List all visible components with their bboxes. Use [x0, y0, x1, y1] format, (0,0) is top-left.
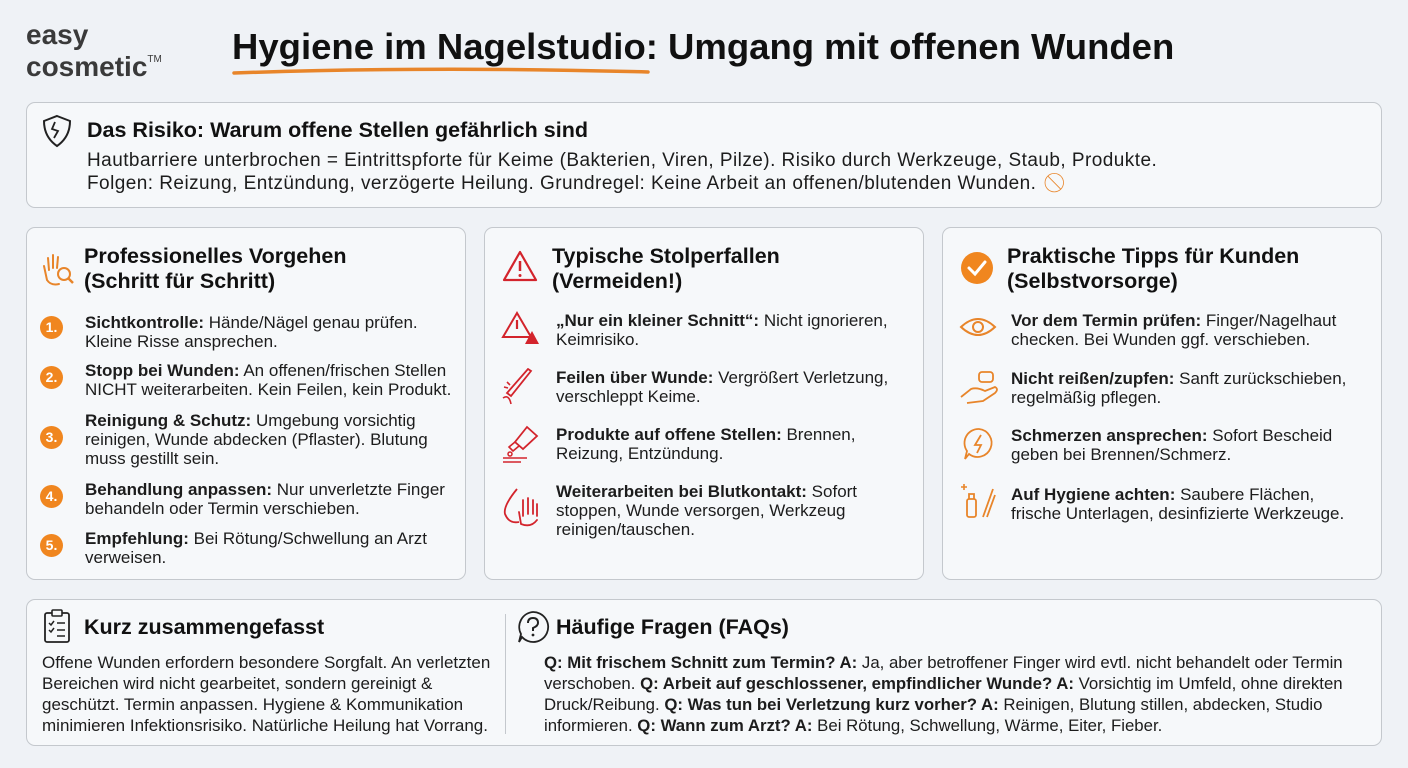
heading	[1007, 244, 1299, 293]
heading: (Vermeiden!)	[552, 269, 682, 293]
tip 4	[961, 484, 1344, 523]
icon: warning	[502, 250, 538, 282]
item 2: Feilen über Wunde: Vergrößert Verletzung,	[556, 368, 888, 387]
item 3: Reizung, Entzündung.	[556, 444, 723, 463]
body text: Folgen: Reizung, Entzündung, verzögerte Heilung. Grundregel: Keine Arbeit an offenen/blutenden Wunden. 🚫︎	[87, 173, 1067, 194]
step 3: Reinigung & Schutz: Umgebung vorsichtig	[85, 411, 416, 430]
step 4	[40, 480, 445, 518]
panel: stolperfallen	[484, 227, 924, 580]
heading: Das Risiko: Warum offene Stellen gefährlich sind	[87, 118, 588, 142]
step 3: 3.	[46, 429, 57, 445]
tip 2	[960, 369, 1346, 407]
step 4: 4.	[46, 488, 57, 504]
item 2: verschleppt Keime.	[556, 387, 701, 406]
body text: Hautbarriere unterbrochen = Eintrittspforte für Keime (Bakterien, Viren, Pilze). Risiko durch Werkzeuge, Staub, Produkte.	[87, 150, 1157, 171]
logo	[26, 19, 162, 82]
heading: faq: Häufige Fragen (FAQs)	[556, 615, 789, 639]
item 1: „Nur ein kleiner Schnitt“: Nicht ignorieren,	[556, 311, 888, 330]
summary text: geschützt. Termin anpassen. Hygiene & Kommunikation	[42, 695, 463, 714]
summary text	[42, 653, 490, 735]
step 1	[40, 313, 418, 351]
logo: cosmeticTM	[26, 51, 162, 82]
step 2: 2.	[46, 369, 57, 385]
summary text: minimieren Infektionsrisiko. Natürliche Heilung hat Vorrang.	[42, 716, 488, 735]
step 1: Kleine Risse ansprechen.	[85, 332, 278, 351]
step 3: reinigen, Wunde abdecken (Pflaster). Blutung	[85, 430, 428, 449]
item 4: reinigen/tauschen.	[556, 520, 695, 539]
tip 3: Schmerzen ansprechen: Sofort Bescheid	[1011, 426, 1332, 445]
step 4: Behandlung anpassen: Nur unverletzte Finger	[85, 480, 445, 499]
item 3: Produkte auf offene Stellen: Brennen,	[556, 425, 855, 444]
icon: question	[518, 611, 550, 643]
item 4: stoppen, Wunde versorgen, Werkzeug	[556, 501, 845, 520]
heading: Praktische Tipps für Kunden	[1007, 244, 1299, 268]
faq text: Druck/Reibung. Q: Was tun bei Verletzung kurz vorher? A: Reinigen, Blutung stillen, abdecken, Studio	[544, 695, 1322, 714]
tip 3: geben bei Brennen/Schmerz.	[1011, 445, 1231, 464]
heading	[84, 244, 346, 293]
step 2: Stopp bei Wunden: An offenen/frischen Stellen	[85, 361, 446, 380]
heading: Professionelles Vorgehen	[84, 244, 346, 268]
item 1: Keimrisiko.	[556, 330, 639, 349]
tip 2: Nicht reißen/zupfen: Sanft zurückschieben,	[1011, 369, 1346, 388]
item 2	[502, 368, 888, 406]
step 2: NICHT weiterarbeiten. Kein Feilen, kein Produkt.	[85, 380, 451, 399]
tip 1: Vor dem Termin prüfen: Finger/Nagelhaut	[1011, 311, 1336, 330]
step 5: 5.	[46, 537, 57, 553]
summary text: Offene Wunden erfordern besondere Sorgfalt. An verletzten	[42, 653, 490, 672]
tip 4: frische Unterlagen, desinfizierte Werkzeuge.	[1011, 504, 1344, 523]
step 5: verweisen.	[85, 548, 166, 567]
tip 1: checken. Bei Wunden ggf. verschieben.	[1011, 330, 1310, 349]
step 1: 1.	[46, 319, 57, 335]
step 1: Sichtkontrolle: Hände/Nägel genau prüfen.	[85, 313, 418, 332]
step 3: muss gestillt sein.	[85, 449, 219, 468]
tip 3	[964, 426, 1332, 464]
item 3	[503, 425, 855, 463]
title underline	[232, 68, 650, 75]
icon: broken shield	[43, 114, 71, 148]
panel: praktische tipps	[942, 227, 1382, 580]
item 4: Weiterarbeiten bei Blutkontakt: Sofort	[556, 482, 857, 501]
faq text: Q: Mit frischem Schnitt zum Termin? A: Ja, aber betroffener Finger wird evtl. nicht behandelt oder Termin	[544, 653, 1343, 672]
tip 1	[960, 311, 1336, 349]
icon: clipboard	[44, 609, 70, 643]
tip 2: regelmäßig pflegen.	[1011, 388, 1161, 407]
panel: risk	[26, 102, 1382, 208]
icon: hand with magnifier	[43, 254, 74, 286]
faq text: verschoben. Q: Arbeit auf geschlossener, empfindlicher Wunde? A: Vorsichtig im Umfeld, ohne direkten	[544, 674, 1343, 693]
summary text: Bereichen wird nicht gearbeitet, sondern gereinigt &	[42, 674, 432, 693]
body text	[87, 150, 1157, 194]
tip 4: Auf Hygiene achten: Saubere Flächen,	[1011, 485, 1314, 504]
heading	[552, 244, 780, 293]
logo: easy	[26, 19, 88, 50]
item 4	[504, 482, 857, 539]
heading: summary: Kurz zusammengefasst	[84, 615, 324, 639]
icon: check circle	[961, 252, 993, 284]
faq text	[544, 653, 1343, 735]
heading: (Schritt für Schritt)	[84, 269, 275, 293]
step 5: Empfehlung: Bei Rötung/Schwellung an Arzt	[85, 529, 427, 548]
step 5	[40, 529, 427, 567]
item 1	[501, 311, 888, 349]
step 2	[40, 361, 451, 399]
title: Hygiene im Nagelstudio: Umgang mit offenen Wunden	[232, 26, 1174, 67]
faq text: informieren. Q: Wann zum Arzt? A: Bei Rötung, Schwellung, Wärme, Eiter, Fieber.	[544, 716, 1162, 735]
step 4: behandeln oder Termin verschieben.	[85, 499, 360, 518]
panel: professionelles vorgehen	[26, 227, 466, 580]
heading: (Selbstvorsorge)	[1007, 269, 1178, 293]
step 3	[40, 411, 428, 468]
heading: Typische Stolperfallen	[552, 244, 780, 268]
panel: bottom	[26, 599, 1382, 746]
